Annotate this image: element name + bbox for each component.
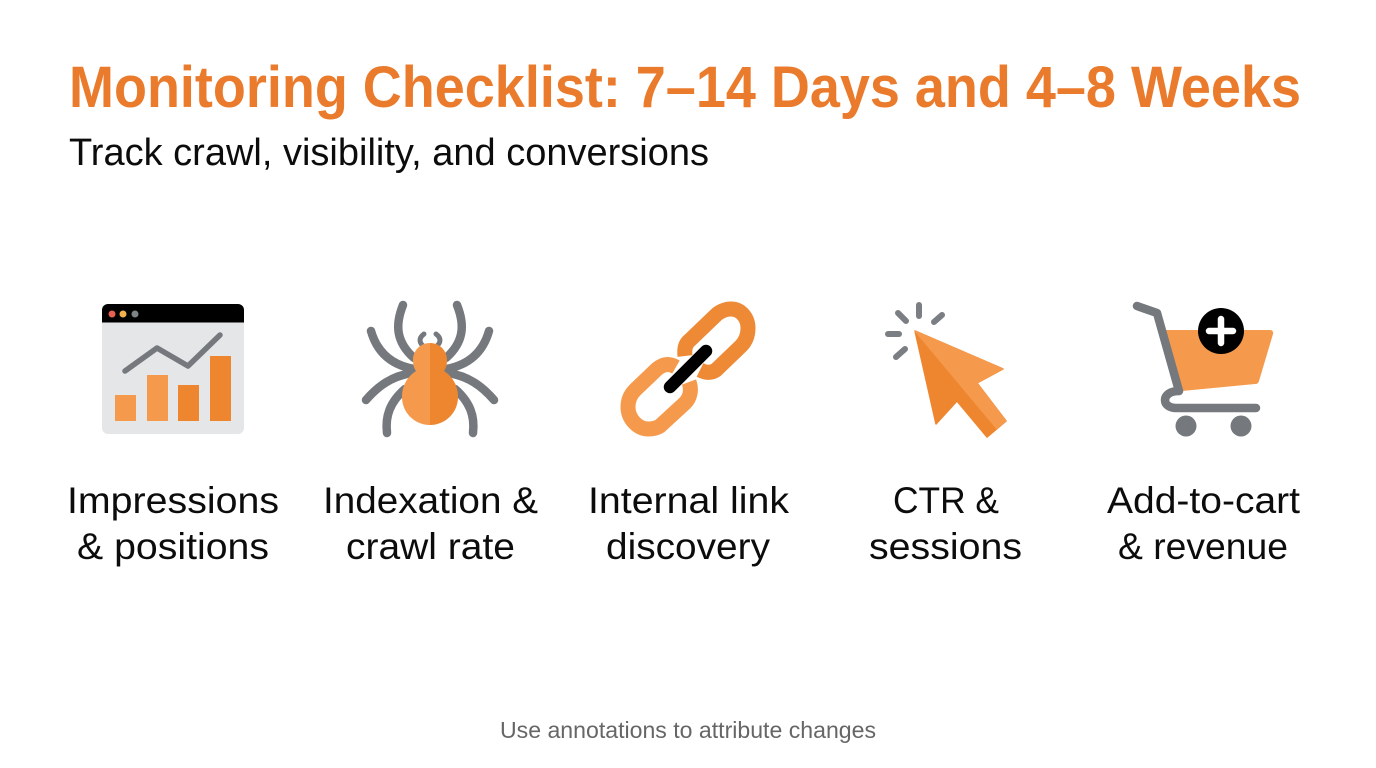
icon: cursor with click rays bbox=[888, 305, 1006, 437]
subtitle: Track crawl, visibility, and conversions bbox=[69, 132, 709, 174]
label: add to cart and revenue bbox=[1107, 480, 1301, 567]
column: ctr and sessions bbox=[869, 305, 1022, 567]
label: add to cart and revenue: & revenue bbox=[1118, 526, 1288, 567]
label: indexation and crawl rate: Indexation & bbox=[323, 480, 538, 521]
label: impressions and positions bbox=[67, 480, 279, 567]
icon: spider bbox=[366, 305, 494, 433]
icon: chain link bbox=[628, 309, 748, 429]
label: impressions and positions: & positions bbox=[77, 526, 269, 567]
label: ctr and sessions bbox=[869, 480, 1022, 567]
column: internal link discovery bbox=[588, 309, 790, 567]
label: internal link discovery: Internal link bbox=[588, 480, 790, 521]
label: indexation and crawl rate: crawl rate bbox=[346, 526, 515, 567]
column: impressions and positions bbox=[67, 304, 279, 567]
icon: browser window with bar chart bbox=[102, 304, 244, 434]
label: add to cart and revenue: Add-to-cart bbox=[1107, 480, 1301, 521]
label: indexation and crawl rate bbox=[323, 480, 538, 567]
icon: shopping cart with plus bbox=[1137, 306, 1273, 436]
title: Monitoring Checklist: 7–14 Days and 4–8 Weeks bbox=[69, 55, 1301, 120]
label: ctr and sessions: CTR & bbox=[893, 480, 999, 521]
label: internal link discovery bbox=[588, 480, 790, 567]
footer note: Use annotations to attribute changes bbox=[500, 717, 876, 743]
label: internal link discovery: discovery bbox=[606, 526, 771, 567]
column: add to cart and revenue bbox=[1107, 306, 1301, 567]
label: ctr and sessions: sessions bbox=[869, 526, 1022, 567]
label: impressions and positions: Impressions bbox=[67, 480, 279, 521]
column: indexation and crawl rate bbox=[323, 305, 538, 567]
